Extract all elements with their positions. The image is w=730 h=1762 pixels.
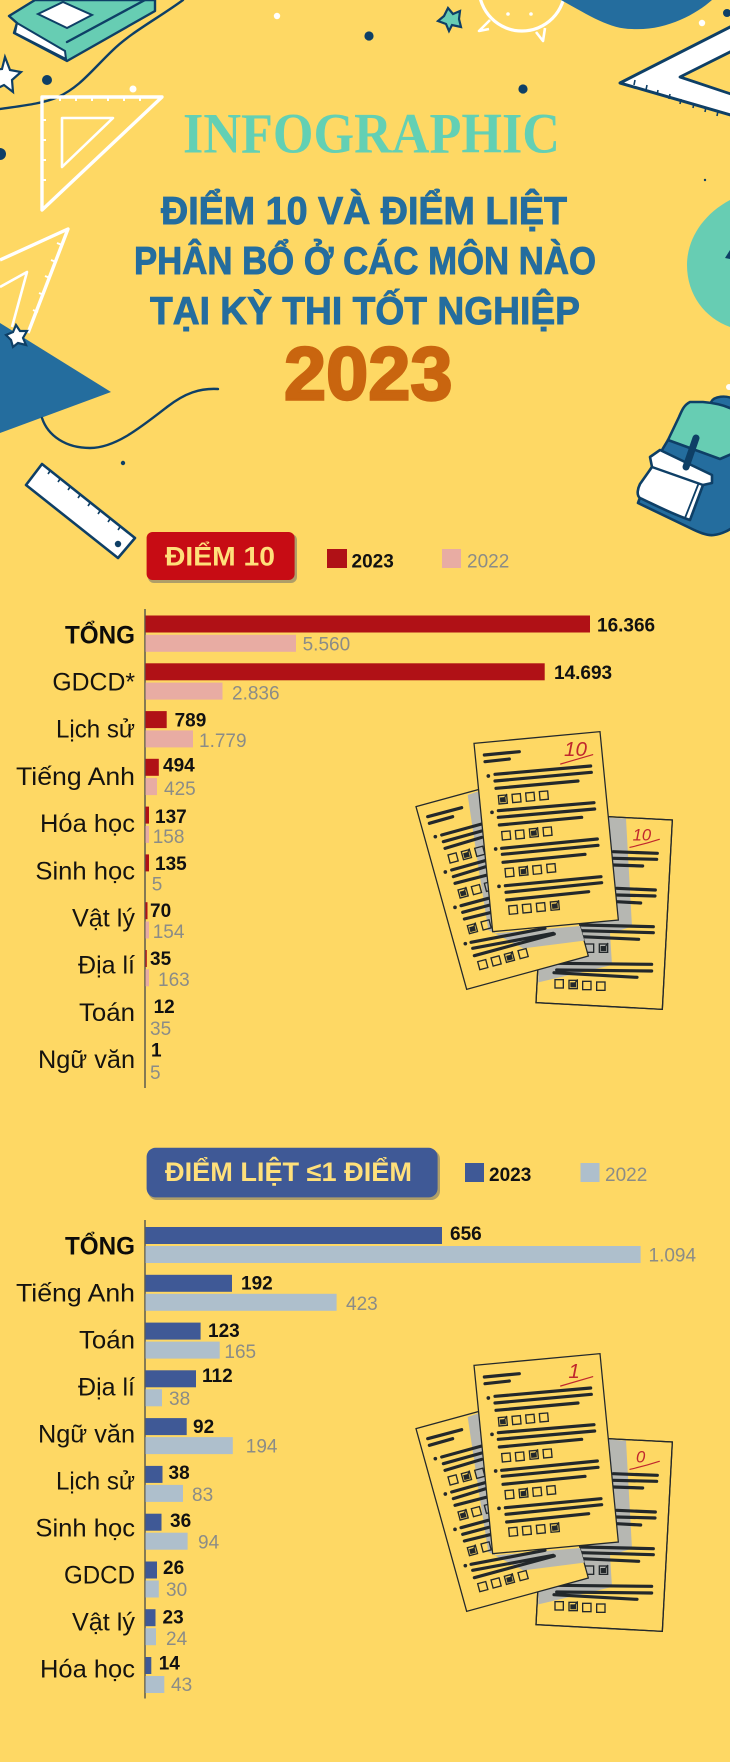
icon: backpack bbox=[638, 397, 730, 535]
row: Tiếng Anh: 423 bbox=[346, 1294, 378, 1315]
row: Địa lí bbox=[78, 949, 190, 991]
row: Sinh học: 36 bbox=[170, 1511, 191, 1532]
row: Lịch sử: Lịch sử bbox=[56, 716, 135, 744]
title: main heading: ĐIỂM 10 VÀ ĐIỂM LIỆT bbox=[161, 188, 567, 233]
badge: điểm liệt bbox=[147, 1148, 440, 1200]
row: Lịch sử bbox=[56, 1463, 213, 1506]
row: Địa lí: 163 bbox=[158, 970, 190, 991]
row: GDCD: 2.836 bbox=[232, 684, 280, 705]
row: Tổng: 5.560 bbox=[303, 635, 350, 656]
row: Tổng: 1.094 bbox=[648, 1246, 696, 1266]
row: Ngữ văn: 5 bbox=[150, 1063, 161, 1084]
icon: ruler bbox=[26, 464, 135, 558]
row: Ngữ văn: 92 bbox=[193, 1417, 214, 1438]
row: Toán: 123 bbox=[208, 1321, 240, 1342]
bar chart: điểm liệt bbox=[16, 1220, 696, 1698]
panel: điểm liệt bbox=[16, 1148, 696, 1698]
teal blob right bbox=[687, 200, 730, 327]
row: Vật lý bbox=[72, 901, 185, 943]
icon: exam papers scored 10: 10 bbox=[564, 738, 587, 761]
row: GDCD bbox=[64, 1558, 187, 1601]
panel: điểm 10 bbox=[16, 532, 672, 1088]
title: infographic: INFOGRAPHIC bbox=[183, 103, 560, 166]
row: Sinh học: 94 bbox=[198, 1532, 220, 1554]
row: Hóa học: 43 bbox=[171, 1675, 192, 1696]
row: Sinh học bbox=[35, 1511, 220, 1554]
row: Địa lí: 35 bbox=[150, 949, 172, 970]
row: Tiếng Anh: 425 bbox=[164, 779, 196, 800]
row: Hóa học bbox=[40, 807, 187, 848]
row: Sinh học: Sinh học bbox=[35, 1514, 135, 1542]
legend: 2023 bbox=[352, 551, 394, 572]
row: Tổng: 656 bbox=[450, 1224, 482, 1245]
title: year: 2023 bbox=[284, 332, 452, 416]
icon: small star bbox=[6, 325, 27, 347]
row: Vật lý: Vật lý bbox=[72, 1608, 135, 1636]
row: GDCD: 26 bbox=[163, 1558, 184, 1579]
row: Hóa học: 14 bbox=[159, 1654, 180, 1675]
row: Vật lý bbox=[72, 1608, 188, 1650]
row: Địa lí: Địa lí bbox=[78, 1373, 135, 1401]
row: Sinh học: 5 bbox=[152, 875, 162, 896]
row: Ngữ văn: 1 bbox=[151, 1041, 162, 1062]
row: Tiếng Anh bbox=[16, 756, 196, 800]
legend bbox=[465, 1163, 647, 1186]
row: Tổng bbox=[65, 1224, 696, 1266]
curved line bottom bbox=[42, 389, 218, 448]
title: main heading bbox=[134, 188, 596, 333]
icon: exam papers scored 10 bbox=[416, 732, 672, 1009]
row: Ngữ văn: Ngữ văn bbox=[38, 1046, 135, 1074]
row: Tổng: 16.366 bbox=[597, 616, 655, 636]
bar chart: điểm 10 bbox=[16, 609, 655, 1088]
legend bbox=[327, 549, 509, 572]
row: Lịch sử: 1.779 bbox=[199, 731, 247, 752]
row: Tổng: TỔNG bbox=[65, 1230, 135, 1260]
row: Tiếng Anh: 192 bbox=[241, 1274, 273, 1295]
icon: white clock bbox=[479, 0, 565, 41]
row: Hóa học: Hóa học bbox=[40, 810, 135, 838]
row: Tiếng Anh: Tiếng Anh bbox=[16, 1279, 135, 1307]
icon: white star left bbox=[0, 57, 21, 92]
row: GDCD bbox=[52, 663, 612, 705]
row: Sinh học: Sinh học bbox=[35, 857, 135, 885]
small mark in teal blob bbox=[725, 250, 730, 259]
row: Vật lý: 23 bbox=[162, 1608, 184, 1629]
legend: 2023 bbox=[489, 1165, 531, 1186]
row: GDCD: 14.693 bbox=[554, 663, 612, 684]
row: Tiếng Anh: Tiếng Anh bbox=[16, 763, 135, 791]
legend: 2022 bbox=[605, 1165, 647, 1186]
row: Lịch sử bbox=[56, 711, 247, 752]
row: Ngữ văn: 194 bbox=[246, 1437, 278, 1458]
icon: exam papers scored 1 and 0 bbox=[416, 1354, 672, 1631]
row: Hóa học: 158 bbox=[153, 827, 184, 848]
row: Địa lí bbox=[78, 1366, 233, 1410]
title: main heading: TẠI KỲ THI TỐT NGHIỆP bbox=[150, 288, 580, 333]
icon: exam papers scored 1 and 0: 1 bbox=[568, 1360, 580, 1383]
row: Vật lý: Vật lý bbox=[72, 904, 135, 932]
icon: set square right bbox=[620, 25, 730, 116]
row: Ngữ văn: Ngữ văn bbox=[38, 1420, 135, 1448]
row: Hóa học bbox=[40, 1654, 192, 1696]
row: Sinh học: 135 bbox=[155, 854, 187, 875]
row: Toán: Toán bbox=[79, 1326, 135, 1354]
icon: second white set square bbox=[0, 229, 68, 333]
row: Toán: 165 bbox=[224, 1342, 256, 1363]
legend: 2022 bbox=[467, 551, 509, 572]
icon: teal star bbox=[438, 8, 461, 31]
row: Tiếng Anh: 494 bbox=[163, 756, 195, 776]
row: Tổng: TỔNG bbox=[65, 619, 135, 649]
row: Ngữ văn bbox=[38, 1417, 278, 1458]
row: Địa lí: 112 bbox=[202, 1366, 233, 1387]
row: Hóa học: 137 bbox=[155, 807, 187, 828]
blue blob top right bbox=[561, 0, 712, 29]
row: Toán bbox=[79, 997, 175, 1040]
row: Tiếng Anh bbox=[16, 1274, 378, 1315]
icon: blue triangle bbox=[0, 323, 111, 433]
row: Sinh học bbox=[35, 854, 187, 896]
row: Vật lý: 154 bbox=[153, 922, 185, 943]
row: Vật lý: 24 bbox=[166, 1629, 188, 1650]
row: Lịch sử: Lịch sử bbox=[56, 1467, 135, 1495]
row: Vật lý: 70 bbox=[150, 901, 171, 922]
decoration: header illustrations bbox=[0, 0, 730, 558]
icon: exam papers scored 10: 10 bbox=[633, 826, 652, 845]
row: GDCD: GDCD* bbox=[52, 668, 135, 696]
row: Toán bbox=[79, 1321, 256, 1363]
badge: điểm 10: ĐIỂM 10 bbox=[165, 540, 275, 572]
row: Hóa học: Hóa học bbox=[40, 1655, 135, 1683]
badge: điểm 10 bbox=[147, 532, 297, 583]
row: Lịch sử: 38 bbox=[168, 1463, 190, 1484]
badge: điểm liệt: ĐIỂM LIỆT ≤1 ĐIỂM bbox=[165, 1156, 412, 1187]
row: GDCD: GDCD bbox=[64, 1561, 135, 1589]
row: Toán: 12 bbox=[154, 997, 175, 1018]
row: Địa lí: 38 bbox=[169, 1389, 190, 1410]
row: Lịch sử: 83 bbox=[192, 1485, 213, 1506]
row: Toán: Toán bbox=[79, 999, 135, 1027]
dots bbox=[0, 9, 730, 465]
row: Lịch sử: 789 bbox=[175, 711, 206, 732]
icon: exam papers scored 1 and 0: 0 bbox=[636, 1448, 646, 1467]
curved line top bbox=[0, 0, 183, 109]
icon: white set square bbox=[42, 97, 162, 210]
row: Địa lí: Địa lí bbox=[78, 952, 135, 980]
row: Ngữ văn bbox=[38, 1041, 162, 1084]
icon: book bbox=[9, 0, 155, 61]
row: Tổng bbox=[65, 616, 655, 656]
row: Toán: 35 bbox=[150, 1019, 171, 1040]
row: GDCD: 30 bbox=[166, 1580, 187, 1601]
title: main heading: PHÂN BỔ Ở CÁC MÔN NÀO bbox=[134, 238, 596, 283]
